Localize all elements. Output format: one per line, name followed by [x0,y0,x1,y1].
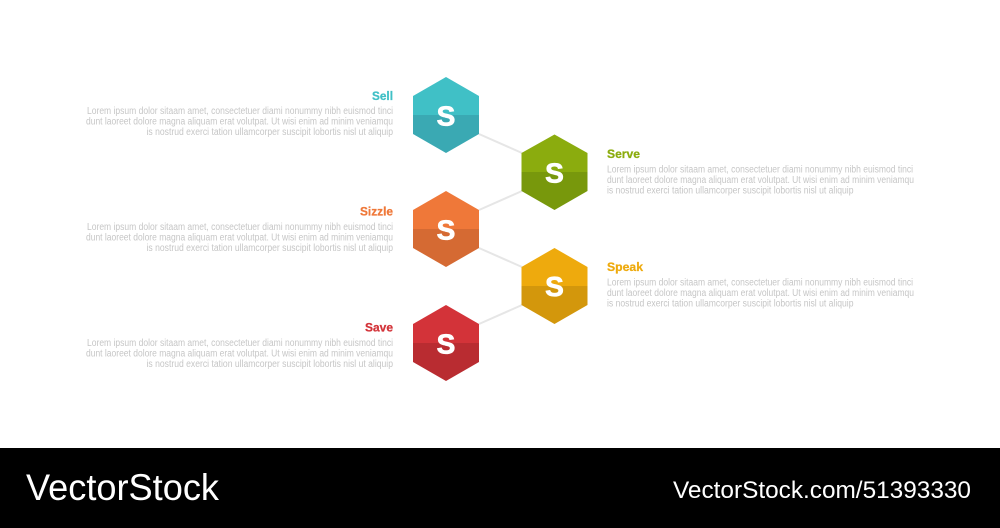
text block: Speak: dunt laoreet dolore magna aliquam erat volutpat. Ut wisi enim ad minim veniamqu [607,288,914,299]
text block: Save: dunt laoreet dolore magna aliquam erat volutpat. Ut wisi enim ad minim veniamqu [86,348,393,360]
text block: Serve: Serve [607,147,640,161]
text block: Sell: dunt laoreet dolore magna aliquam erat volutpat. Ut wisi enim ad minim veniamqu [86,116,393,128]
hexagon: Save: S [437,328,455,360]
text block: Sell: Lorem ipsum dolor sitaam amet, consectetuer diami nonummy nibh euismod tinci [87,106,393,117]
footer logo: VectorStock [26,467,219,508]
text block: Save: Save [365,320,393,334]
hexagon: Sell [413,77,479,153]
text block: Speak: Lorem ipsum dolor sitaam amet, consectetuer diami nonummy nibh euismod tinci [607,278,913,288]
text block: Sizzle: dunt laoreet dolore magna aliquam erat volutpat. Ut wisi enim ad minim veniamqu [86,232,393,244]
hexagon: Speak: S [545,271,564,302]
text block: Serve [607,147,914,196]
text block: Serve: dunt laoreet dolore magna aliquam erat volutpat. Ut wisi enim ad minim veniamqu [607,175,914,186]
connector lines [479,134,522,324]
hexagon: Serve: S [545,158,564,188]
text block: Save: Lorem ipsum dolor sitaam amet, consectetuer diami nonummy nibh euismod tinci [87,338,393,349]
text block: Sell [86,89,393,138]
text block: Sizzle: Sizzle [360,204,393,218]
hexagon: Sizzle: S [437,214,455,246]
text block: Speak: is nostrud exerci tation ullamcorper suscipit lobortis nisl ut aliquip [607,298,854,310]
text block: Sizzle: is nostrud exerci tation ullamcorper suscipit lobortis nisl ut aliquip [146,243,393,254]
text block: Sell: Sell [372,89,393,103]
hexagon: Speak [522,248,588,324]
text block: Speak: Speak [607,260,643,274]
hexagon: Sizzle [413,191,479,267]
text block: Serve: Lorem ipsum dolor sitaam amet, consectetuer diami nonummy nibh euismod tinci [607,164,913,176]
hexagon: Serve [522,134,588,210]
footer image id: VectorStock.com/51393330 [673,477,971,504]
text block: Speak [607,260,914,310]
footer bar [0,448,1000,528]
text block: Sizzle: Lorem ipsum dolor sitaam amet, consectetuer diami nonummy nibh euismod tinci [87,222,393,233]
hexagon: Sell: S [437,100,455,132]
text block: Sizzle [86,204,393,254]
text block: Serve: is nostrud exerci tation ullamcorper suscipit lobortis nisl ut aliquip [607,186,854,196]
text block: Save: is nostrud exerci tation ullamcorper suscipit lobortis nisl ut aliquip [146,359,393,370]
text block: Sell: is nostrud exerci tation ullamcorper suscipit lobortis nisl ut aliquip [146,127,393,138]
text block: Save [86,320,393,370]
hexagon: Save [413,305,479,381]
